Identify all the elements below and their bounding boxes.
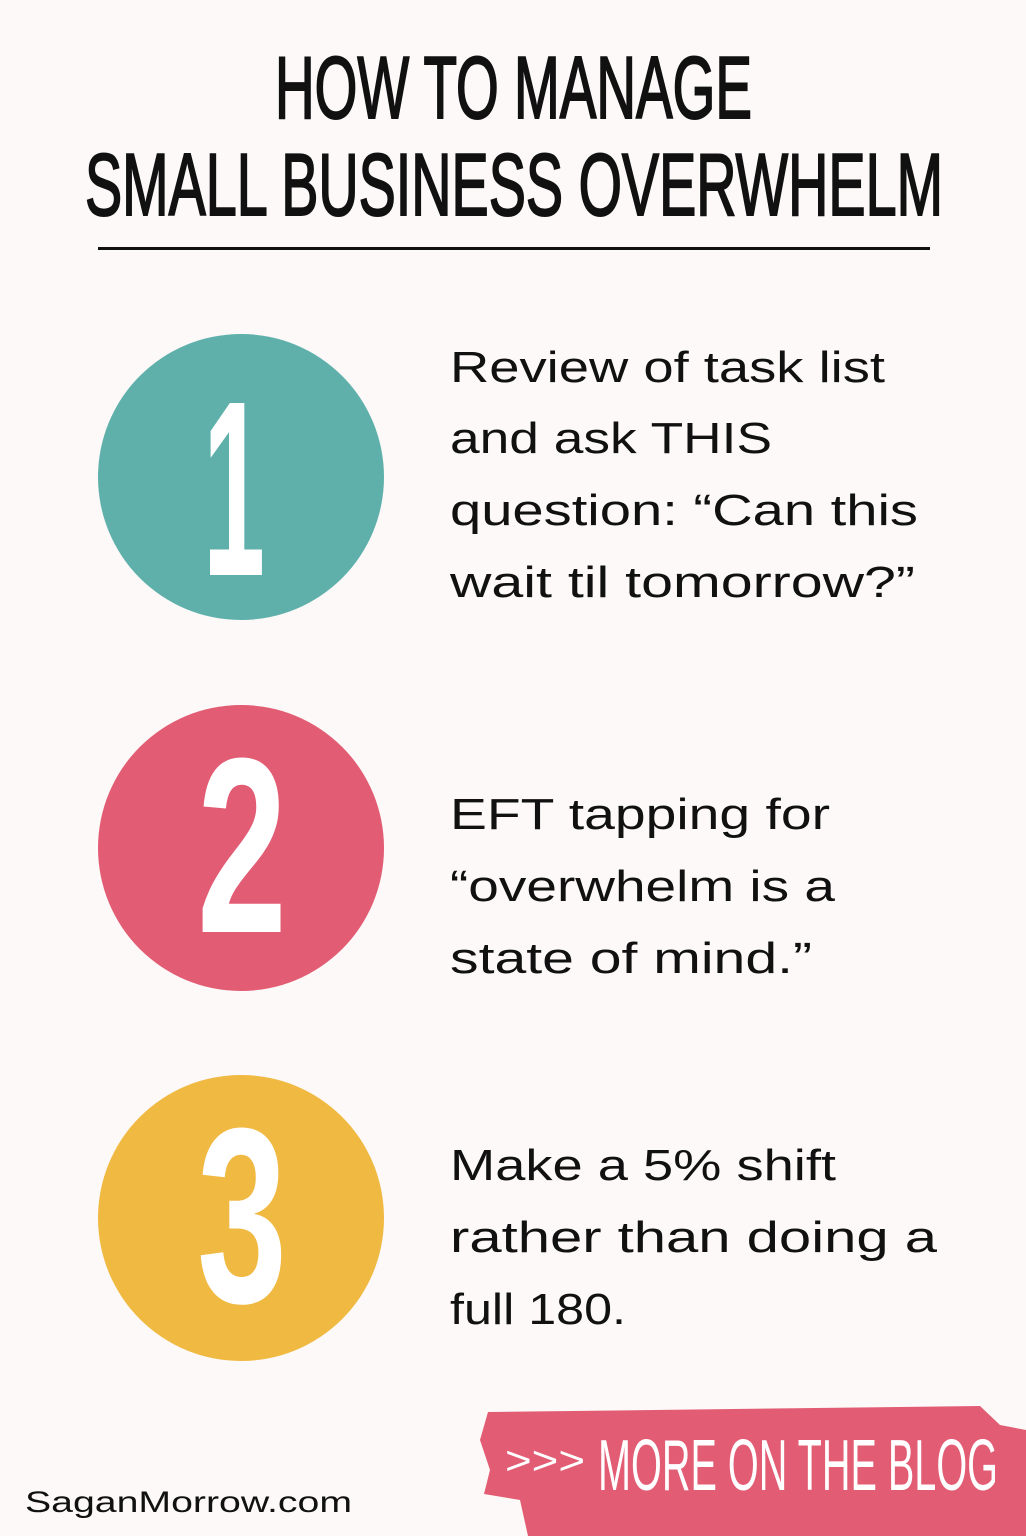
step 3 text: full 180.	[450, 1285, 626, 1334]
step 1 number circle	[98, 334, 384, 628]
title: HOW TO MANAGE	[275, 38, 752, 137]
step 3 text: Make a 5% shift	[450, 1141, 836, 1190]
blog banner	[480, 1406, 1026, 1536]
step 1 text	[449, 343, 918, 607]
step 3 text	[450, 1141, 938, 1334]
step 2 number circle: 2	[197, 706, 287, 985]
step 1 text: wait til tomorrow?”	[449, 558, 915, 607]
title	[85, 38, 943, 234]
step 1 number circle: 1	[203, 349, 265, 628]
step 3 number circle	[98, 1075, 384, 1361]
step 2 text: state of mind.”	[450, 934, 812, 983]
step 2 text: EFT tapping for	[450, 790, 830, 839]
footer website: SaganMorrow.com	[25, 1486, 352, 1519]
step 3 text: rather than doing a	[450, 1213, 938, 1262]
step 2 text: “overwhelm is a	[450, 862, 836, 911]
step 2 number circle	[98, 705, 384, 991]
step 1 text: and ask THIS	[450, 414, 772, 463]
step 1 text: question: “Can this	[450, 486, 918, 535]
blog banner: >>>	[505, 1439, 585, 1483]
step 2 text	[450, 790, 836, 983]
step 3 number circle: 3	[197, 1076, 287, 1355]
step 1 text: Review of task list	[450, 343, 885, 392]
